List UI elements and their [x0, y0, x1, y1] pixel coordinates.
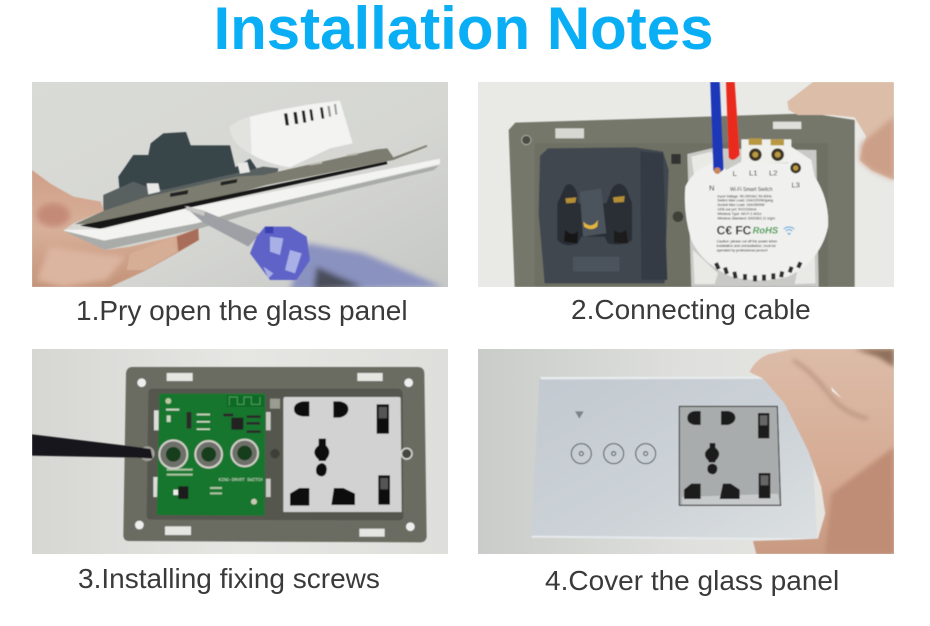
icon: round wifi smart switch module: Caution: please cut off the power when	[717, 240, 777, 244]
icon: blue and red wires	[710, 82, 740, 174]
text: pcb silk label: KING-SMART SWITCH	[219, 478, 263, 483]
icon: round wifi smart switch module: N	[709, 184, 715, 193]
icon: terminal screws	[741, 138, 791, 163]
icon: screwdriver shaft	[32, 434, 155, 461]
icon: round wifi smart switch module: RoHS	[753, 226, 779, 236]
icon: hand holding the panel	[32, 170, 199, 287]
icon: glass panel	[531, 376, 817, 540]
icon: round wifi smart switch module: L3	[791, 180, 800, 189]
icon: dark socket body	[118, 132, 260, 195]
icon: touch button 2	[604, 444, 624, 464]
icon: grey mounting plate	[509, 82, 894, 287]
icon: round wifi smart switch module: operated by professional person!	[717, 249, 768, 253]
icon: wifi indicator	[575, 411, 584, 419]
icon: universal socket with USB ports	[679, 406, 781, 505]
icon: screwdriver	[184, 206, 260, 247]
icon: white switch module with vents	[230, 101, 353, 167]
caption: step 2: 2.Connecting cable	[571, 294, 811, 325]
icon: round wifi smart switch module: L	[733, 169, 737, 178]
icon: round wifi smart switch module: C€	[717, 223, 732, 237]
icon: round wifi smart switch module: Wi-Fi Smart Switch	[730, 187, 773, 193]
icon: round wifi smart switch module: USB out put: 5V/2100mA	[717, 208, 757, 212]
icon: green circuit board	[157, 394, 265, 516]
icon: round wifi smart switch module: Wireless Standard: IEEE802.11 b/g/n	[717, 217, 775, 221]
panel: step 1 photo, pry open the glass panel	[32, 82, 448, 287]
icon: hand holding the plate	[787, 82, 894, 180]
icon: round wifi smart switch module: L2	[769, 169, 778, 178]
icon: white glass panel	[61, 159, 440, 241]
panel: step 4 photo, cover the glass panel	[478, 349, 894, 554]
panel: step 2 photo, connecting cable	[478, 82, 894, 287]
caption: step 1: 1.Pry open the glass panel	[76, 295, 408, 326]
icon: round wifi smart switch module: Socket Max Load: 16A/3500W	[717, 203, 765, 207]
caption: step 4: 4.Cover the glass panel	[545, 565, 839, 596]
icon: touch button 1	[571, 444, 591, 464]
panel: step 3 photo, installing fixing screws	[32, 349, 448, 554]
icon: round wifi smart switch module: Input Voltage: 95-250VAC 50-60Hz	[717, 194, 772, 198]
icon: round wifi smart switch module: installation and uninstallation, must be	[717, 244, 776, 248]
icon: round wifi smart switch module: Switch Max Load: 10A/2200W/gang	[717, 199, 773, 203]
icon: grey mounting plate	[75, 145, 427, 224]
icon: round wifi smart switch module	[685, 143, 828, 281]
icon: touch button 3	[636, 444, 656, 464]
icon: round wifi smart switch module: Wireless Type: Wi-Fi 2.4Ghz	[717, 212, 762, 216]
icon: round wifi smart switch module: L1	[749, 169, 758, 178]
caption: step 3: 3.Installing fixing screws	[78, 563, 380, 594]
icon: round wifi smart switch module: FC	[735, 223, 752, 237]
icon: white universal socket with USB ports	[283, 397, 402, 512]
icon: grey mounting plate	[123, 367, 427, 542]
icon: hand covering the panel	[750, 349, 894, 554]
icon: dark wall socket	[539, 147, 669, 283]
